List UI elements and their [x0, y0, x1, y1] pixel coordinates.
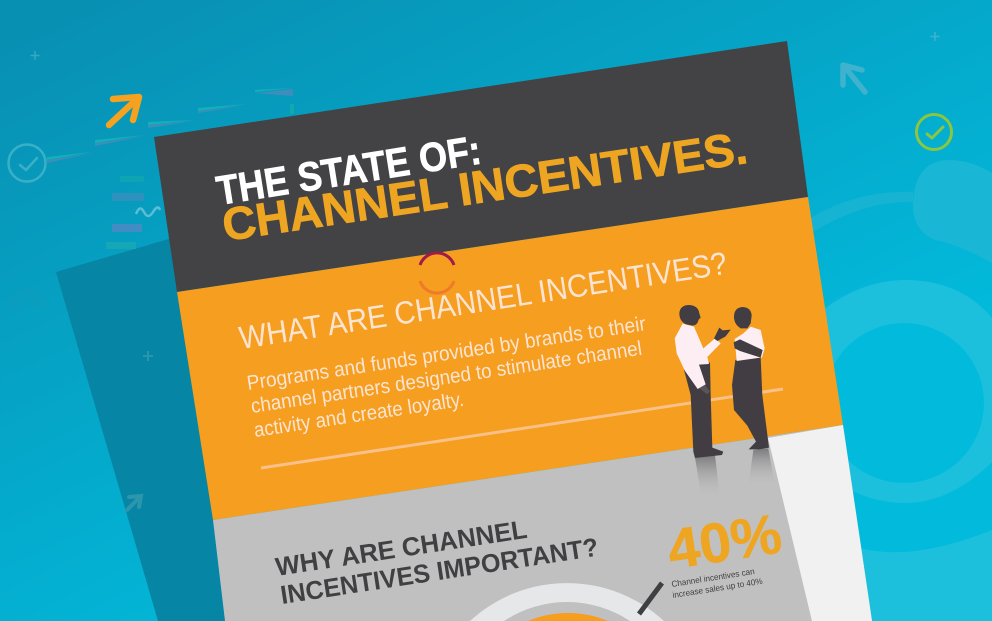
icon: dark arrow: [127, 496, 141, 510]
ghost check icon across the bands: [420, 253, 454, 293]
icon: pale arrow top right: [843, 65, 865, 92]
section heading: why are channel incentives important: INCENTIVES IMPORTANT?: [278, 532, 600, 610]
man on the left: [675, 305, 731, 458]
back sheet: [56, 238, 240, 621]
callout leader: [639, 583, 662, 614]
icon: pale check circle: [8, 144, 46, 182]
icon: squiggle: [136, 207, 160, 216]
text block: definition: Programs and funds provided by brands to their: [245, 312, 647, 395]
icon: plus top left: [30, 51, 40, 60]
icon: green check circle: [916, 114, 952, 150]
panel: dark title band: [154, 41, 808, 292]
floor shadows: [695, 448, 775, 498]
illustration: two businessmen talking: [675, 305, 775, 498]
stat caption: [671, 566, 764, 600]
icon: orange arrow: [109, 97, 139, 125]
poster: [154, 41, 872, 621]
heading: what are channel incentives: WHAT ARE CHANNEL INCENTIVES?: [237, 245, 729, 356]
text block: definition: activity and create loyalty.: [252, 388, 465, 442]
background streak marks: [47, 88, 294, 249]
man on the right: [732, 307, 769, 449]
divider line: [261, 389, 783, 468]
title line 1: THE STATE OF:: [213, 127, 484, 214]
text block: definition: [245, 312, 647, 442]
icon: plus top right: [930, 32, 940, 41]
decorative logo shape, right side: [800, 160, 992, 621]
text block: definition: channel partners designed to stimulate channel: [249, 337, 643, 418]
icon: faint arc: [9, 290, 46, 308]
panel: orange definition band: [177, 197, 843, 520]
title line 2: CHANNEL INCENTIVES.: [219, 121, 751, 251]
section heading: why are channel incentives important: WHY ARE CHANNEL: [273, 514, 529, 582]
panel: white wedge: [768, 425, 872, 621]
stat caption: Channel incentives can: [671, 566, 756, 589]
panel: gray section: [213, 425, 872, 621]
stat caption: increase sales up to 40%: [672, 576, 764, 600]
icon: dark plus: [143, 351, 153, 361]
stat: 40%: 40%: [663, 502, 786, 581]
donut chart, partly visible: [470, 583, 664, 621]
